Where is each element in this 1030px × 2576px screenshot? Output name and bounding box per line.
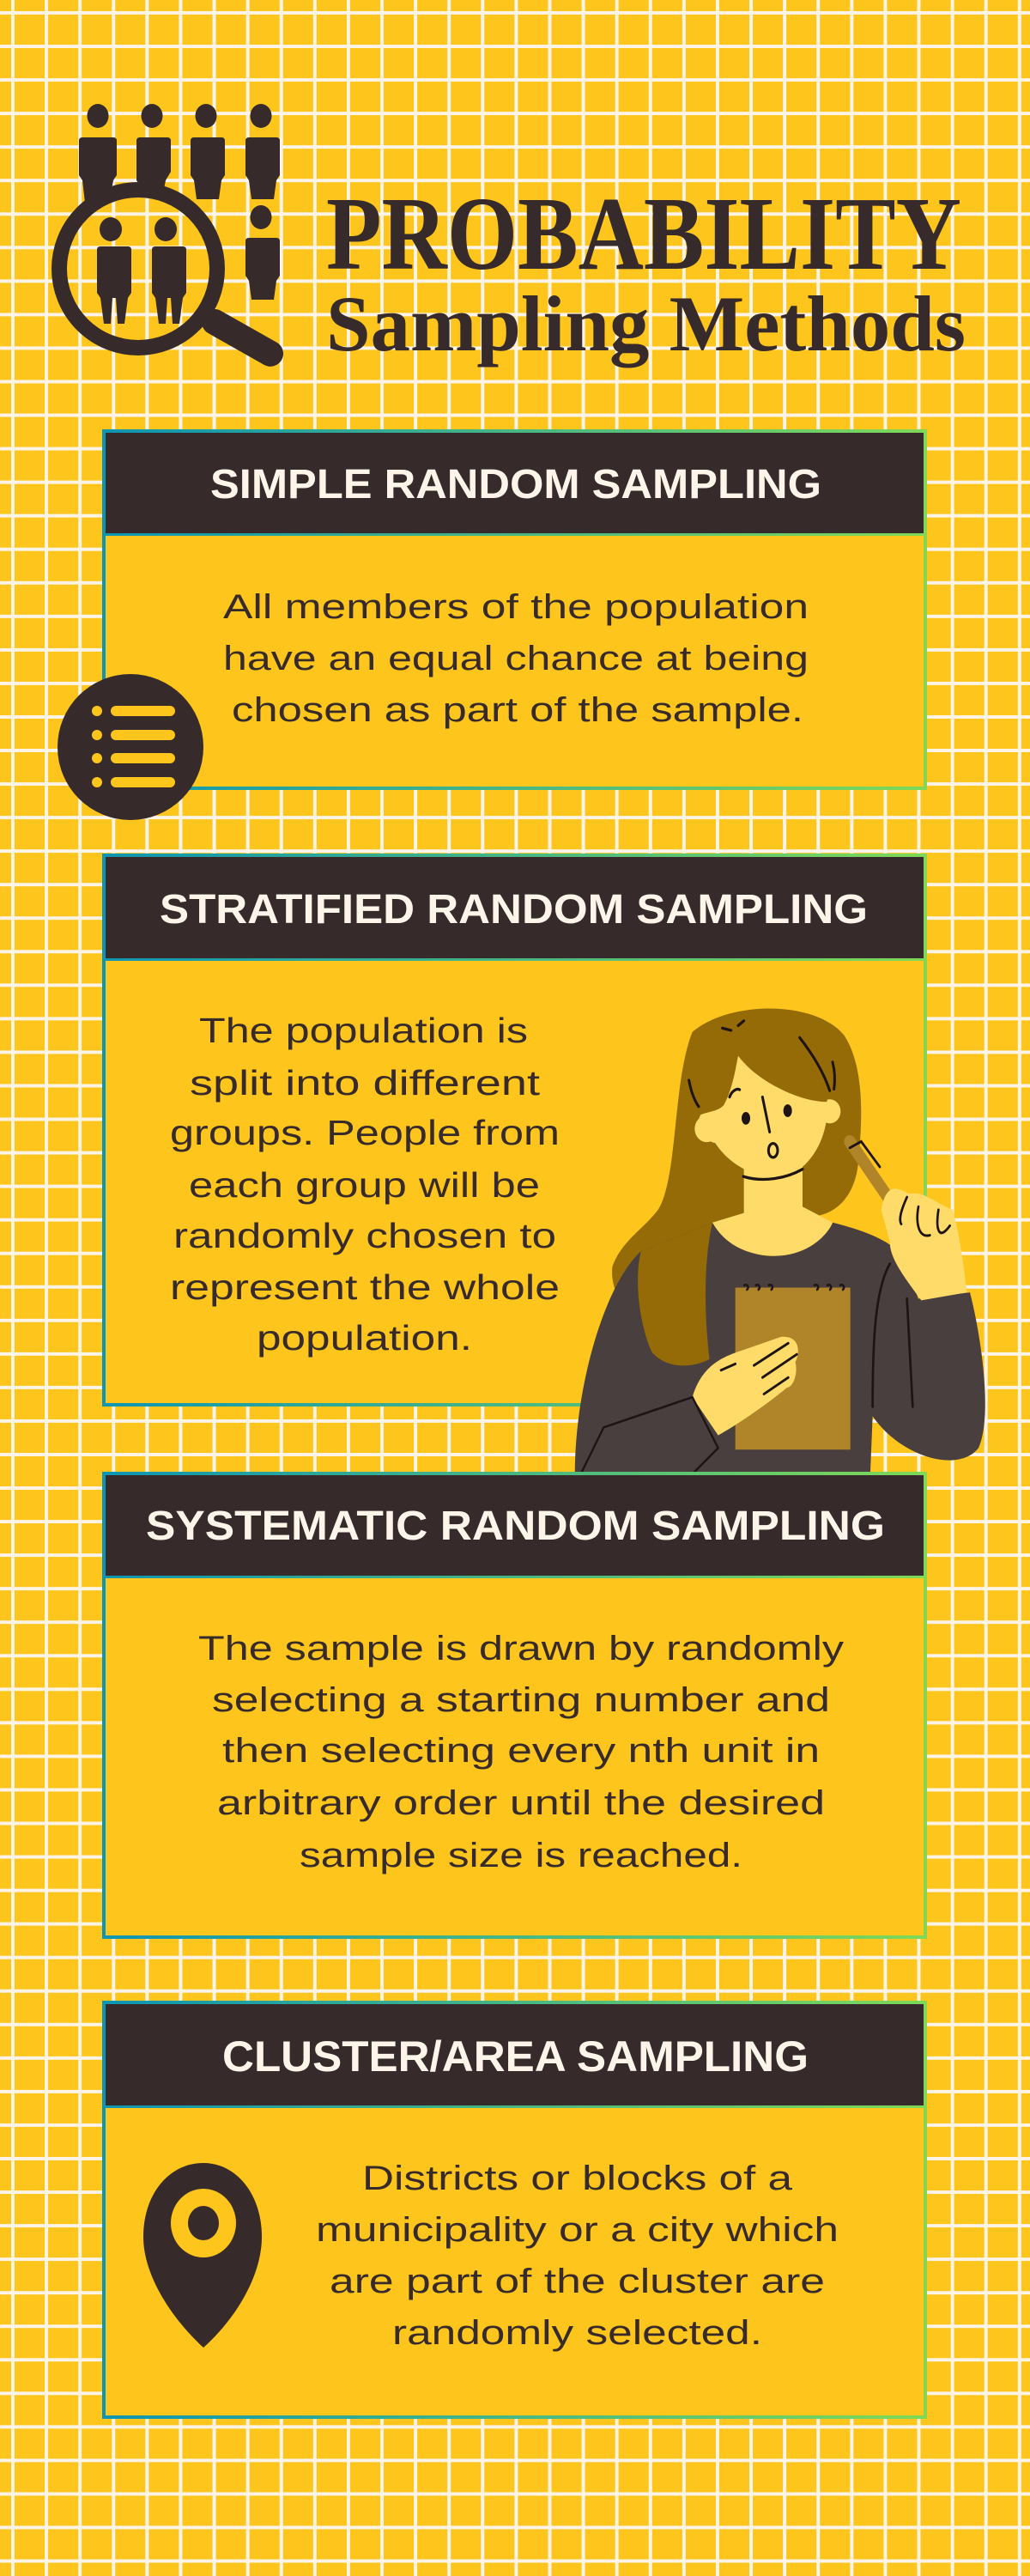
text: stratified description: represent the whole [170, 1267, 560, 1307]
text: stratified description: split into different [190, 1063, 541, 1103]
text: simple random description [223, 588, 809, 729]
heading: stratified: STRATIFIED RANDOM SAMPLING [160, 887, 868, 933]
text: systematic description: then selecting every nth unit in [222, 1732, 820, 1770]
heading: systematic: SYSTEMATIC RANDOM SAMPLING [146, 1504, 885, 1549]
icon: list [58, 674, 203, 820]
title: Sampling Methods [326, 280, 966, 368]
icon: people with magnifier [59, 104, 280, 354]
text: systematic description: selecting a starting number and [212, 1681, 830, 1719]
text: systematic description: arbitrary order until the desired [217, 1784, 825, 1822]
text: simple random description: have an equal chance at being [223, 640, 809, 677]
text: systematic description: sample size is reached. [300, 1837, 742, 1874]
text: cluster description: are part of the cluster are [330, 2263, 825, 2300]
text: systematic description [198, 1630, 844, 1874]
panel: stratified random sampling [104, 855, 925, 1405]
panel: simple random sampling [104, 431, 925, 788]
text: systematic description: The sample is drawn by randomly [198, 1630, 844, 1668]
text: stratified description: each group will be [189, 1165, 540, 1205]
text: cluster description: Districts or blocks of a [362, 2160, 793, 2197]
text: stratified description: population. [257, 1318, 472, 1358]
illustration: woman with notepad and pencil [575, 1008, 985, 1472]
text: cluster description [316, 2160, 839, 2352]
text: cluster description: randomly selected. [392, 2314, 762, 2352]
text: simple random description: chosen as part of the sample. [232, 691, 803, 729]
text: simple random description: All members of the population [223, 588, 809, 626]
panel: systematic random sampling [104, 1473, 925, 1937]
heading: cluster: CLUSTER/AREA SAMPLING [222, 2032, 809, 2081]
text: stratified description: The population is [199, 1011, 528, 1050]
heading: simple random sampling: SIMPLE RANDOM SAMPLING [210, 462, 821, 507]
text: stratified description: groups. People from [170, 1113, 560, 1152]
icon: location pin [143, 2163, 262, 2348]
title [326, 176, 966, 368]
text: stratified description [170, 1011, 560, 1358]
text: cluster description: municipality or a city which [316, 2211, 839, 2249]
panel: cluster/area sampling [104, 2002, 925, 2417]
text: stratified description: randomly chosen to [173, 1216, 556, 1255]
